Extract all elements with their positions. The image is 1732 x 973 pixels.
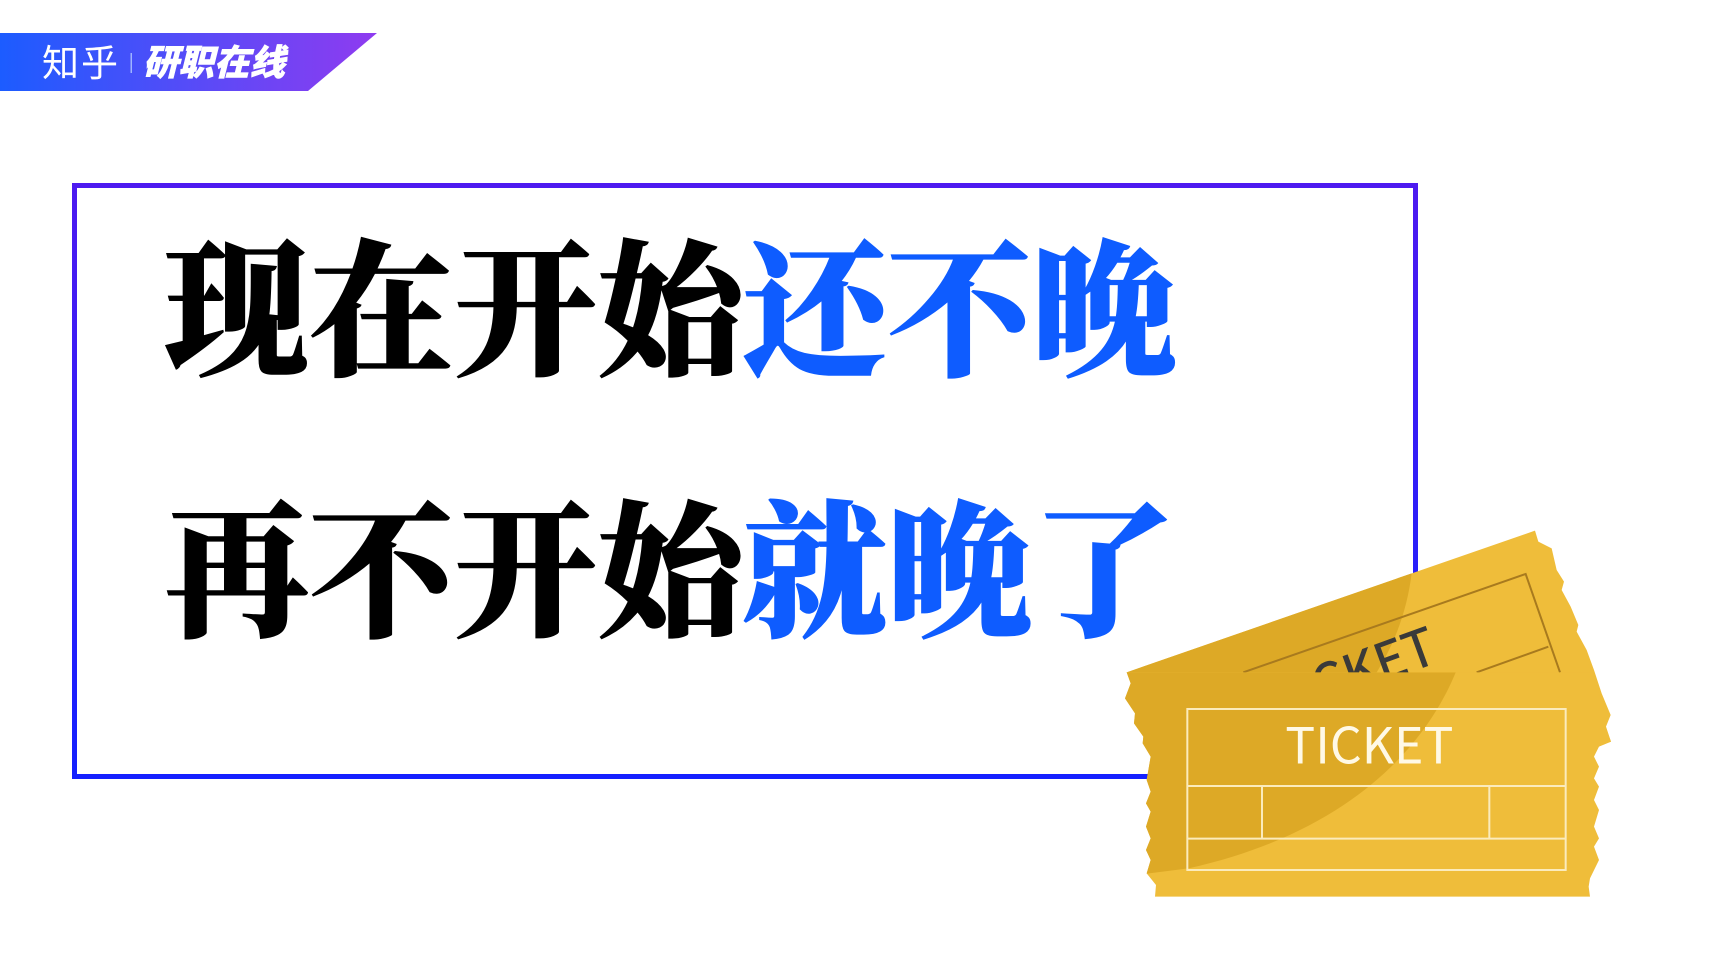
headline line 1: 现在开始还不晚 bbox=[164, 233, 1176, 396]
brand: 知乎: 知乎 bbox=[42, 43, 120, 84]
brand: 研职在线: 研职在线 bbox=[141, 43, 293, 83]
ticket panel lines bbox=[1187, 709, 1566, 870]
headline frame bbox=[74, 186, 1416, 776]
header badge bbox=[0, 33, 377, 91]
illustration: tickets bbox=[1110, 531, 1611, 897]
back ticket: CKET bbox=[1299, 605, 1445, 719]
badge background bbox=[0, 33, 377, 91]
headline line 2: 再不开始就晚了 bbox=[164, 494, 1176, 657]
ticket label: TICKET bbox=[1285, 706, 1453, 778]
front ticket bbox=[1110, 670, 1611, 897]
brand divider bbox=[130, 53, 132, 73]
back ticket bbox=[1127, 531, 1611, 777]
